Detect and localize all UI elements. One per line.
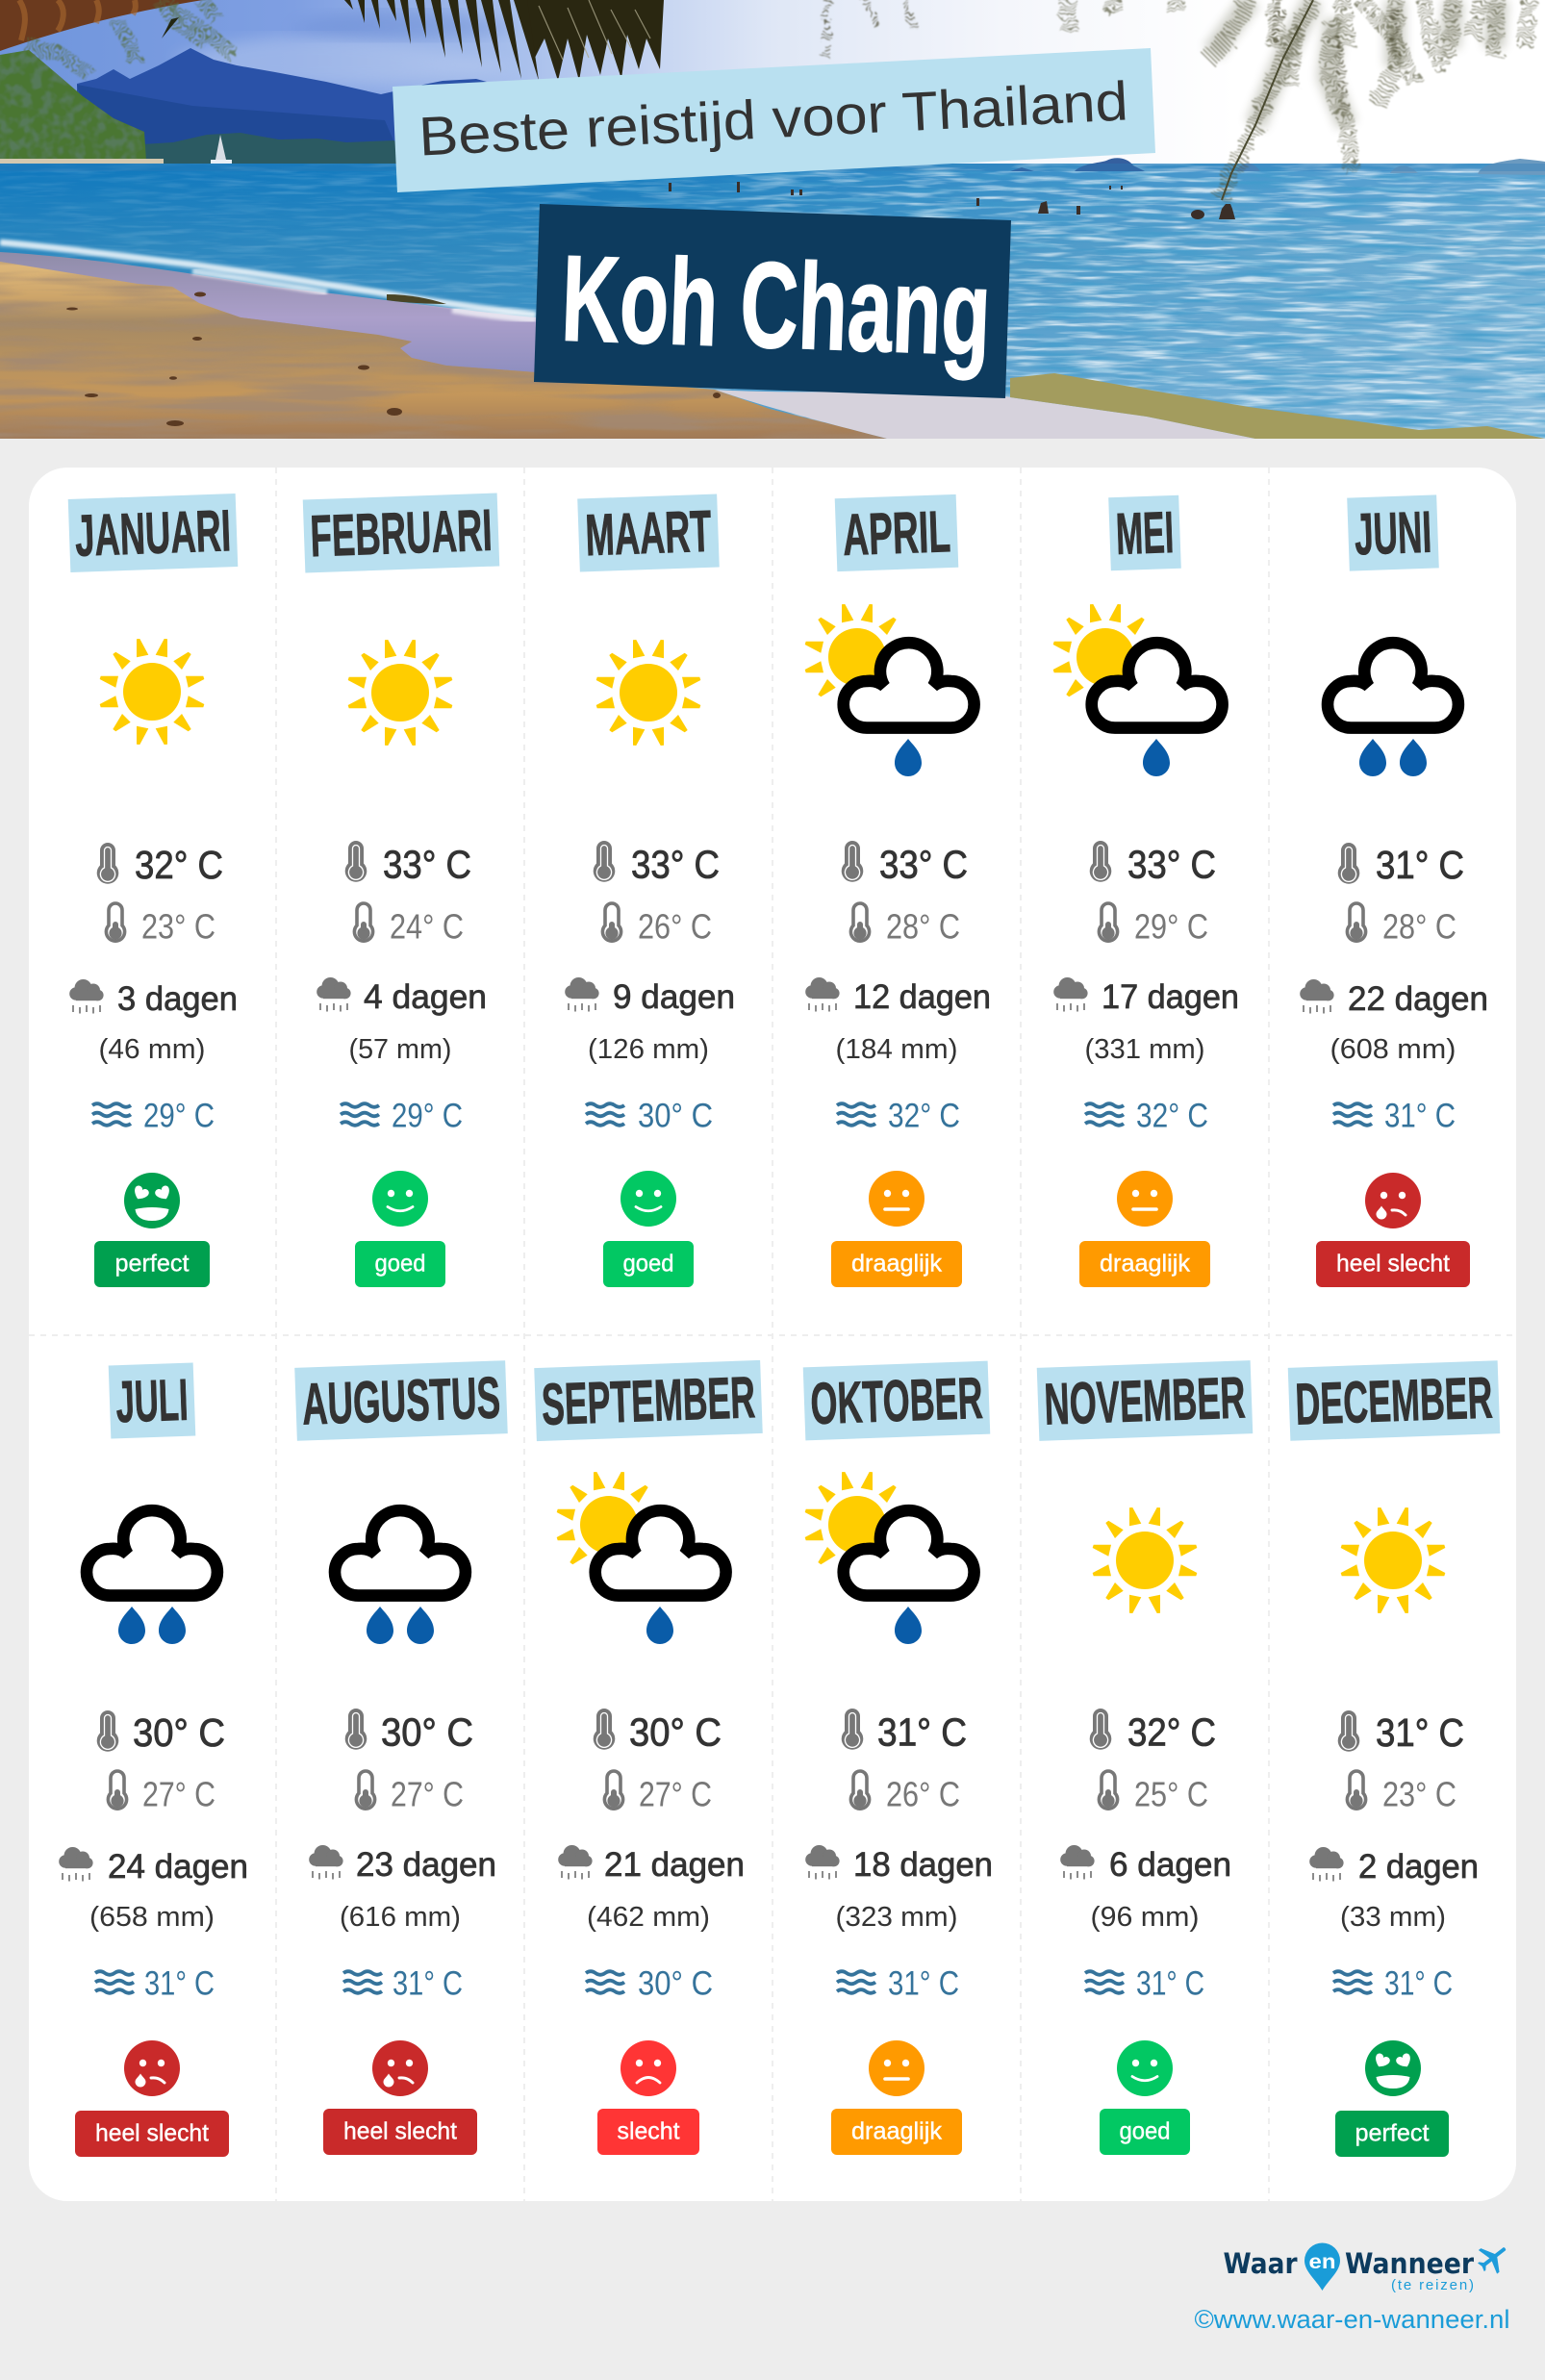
rainfall: (96 mm) (1090, 1902, 1200, 1933)
rating badge: draaglijk (851, 2118, 942, 2145)
month heading (109, 1362, 195, 1439)
min temperature (1099, 1771, 1208, 1814)
rain days: 24 dagen (108, 1848, 248, 1886)
sea temperature: 31° C (1384, 1964, 1453, 2003)
logo: Waar en Wanneer: (te reizen) (1391, 2277, 1474, 2293)
max temperature (1338, 843, 1464, 887)
rating icon (621, 1171, 676, 1227)
month heading: APRIL (842, 498, 951, 568)
min temperature (1347, 903, 1456, 947)
month heading: JANUARI (74, 497, 232, 569)
month heading (835, 494, 958, 571)
sea temperature (1333, 1097, 1456, 1135)
icon: airplane (1472, 2237, 1514, 2279)
title banner: Koh Chang: Koh Chang (560, 229, 993, 381)
min temperature (106, 903, 215, 947)
rating badge (355, 1241, 445, 1287)
rating badge: goed (1120, 2118, 1170, 2145)
sea temperature: 32° C (888, 1097, 960, 1135)
rating badge (1335, 2111, 1449, 2157)
rainfall: (33 mm) (1340, 1902, 1446, 1933)
rain days: 9 dagen (613, 978, 735, 1016)
max temperature: 32° C (1127, 1710, 1216, 1755)
sea temperature: 29° C (143, 1097, 215, 1135)
sea temperature: 32° C (1136, 1097, 1208, 1135)
sea temperature: 31° C (1384, 1097, 1456, 1135)
icon: sun (1341, 1507, 1445, 1613)
max temperature: 31° C (1376, 1710, 1464, 1755)
panel: februari (303, 493, 499, 1287)
icon: cloud and two drops (335, 1510, 466, 1644)
min temperature: 24° C (390, 906, 464, 947)
month heading (294, 1360, 508, 1441)
month heading (68, 494, 238, 572)
month heading: NOVEMBER (1043, 1364, 1247, 1437)
month heading (577, 494, 720, 572)
panel: april (805, 494, 991, 1287)
month heading (303, 493, 499, 573)
icon: sun (348, 640, 452, 746)
month heading: SEPTEMBER (541, 1364, 756, 1437)
rating badge (323, 2109, 477, 2155)
panel: mei (1053, 495, 1239, 1287)
rating icon (869, 2040, 924, 2096)
title banner: Beste reistijd voor Thailand (393, 48, 1155, 192)
rain days: 21 dagen (604, 1846, 745, 1884)
min temperature: 23° C (141, 906, 215, 947)
logo: Waar en Wanneer: Wanneer (1345, 2247, 1475, 2280)
sea temperature (586, 1964, 713, 2003)
rain days (1309, 1847, 1479, 1886)
rating badge: draaglijk (851, 1251, 942, 1278)
title banner: Beste reistijd voor Thailand: Beste reistijd voor Thailand (418, 70, 1129, 168)
rating badge: goed (623, 1251, 673, 1278)
min temperature: 26° C (886, 1774, 960, 1814)
icon: sun (1093, 1507, 1197, 1613)
sea temperature: 31° C (393, 1964, 463, 2003)
min temperature (602, 903, 712, 947)
rating icon (869, 1171, 924, 1227)
panel: juni (1300, 494, 1488, 1287)
rainfall: (126 mm) (588, 1034, 709, 1065)
rating badge (1079, 1241, 1210, 1287)
sea temperature: 30° C (638, 1097, 713, 1135)
rainfall: (658 mm) (89, 1902, 215, 1933)
month heading: MAART (584, 498, 713, 568)
rating badge: heel slecht (343, 2118, 457, 2145)
rainfall: (462 mm) (587, 1902, 710, 1933)
min temperature: 27° C (142, 1774, 215, 1814)
sea temperature (586, 1097, 713, 1135)
max temperature: 30° C (133, 1710, 225, 1755)
panel: december (1288, 1360, 1500, 2157)
sea temperature (837, 1097, 960, 1135)
rating badge (603, 1241, 694, 1287)
rainfall: (184 mm) (835, 1034, 958, 1065)
rating badge (1316, 1241, 1470, 1287)
min temperature (356, 1771, 464, 1814)
month heading: OKTOBER (809, 1365, 984, 1436)
rainfall: (46 mm) (98, 1034, 206, 1065)
sea temperature: 31° C (888, 1964, 959, 2003)
rain days: 22 dagen (1348, 980, 1488, 1018)
min temperature (1347, 1771, 1456, 1814)
rating badge: perfect (1355, 2120, 1430, 2147)
rating icon (1117, 1171, 1173, 1227)
rain days: 12 dagen (853, 978, 991, 1016)
sea temperature (95, 1964, 215, 2003)
rating badge: perfect (115, 1251, 190, 1278)
panel: november (1037, 1360, 1253, 2155)
panel: calendar card (29, 468, 1516, 2201)
sea temperature (1085, 1964, 1204, 2003)
max temperature: 33° C (879, 843, 968, 887)
month heading (534, 1360, 763, 1441)
icon: map pin (1304, 2243, 1340, 2291)
max temperature (594, 841, 720, 887)
icon: cloud and two drops (1328, 643, 1458, 776)
rainfall: (608 mm) (1330, 1034, 1456, 1065)
min temperature: 25° C (1134, 1774, 1208, 1814)
max temperature (1090, 1709, 1216, 1755)
max temperature (345, 841, 471, 887)
month heading: AUGUSTUS (301, 1364, 501, 1437)
month heading (1347, 494, 1439, 571)
min temperature (1099, 903, 1208, 947)
month heading (1108, 495, 1181, 570)
sea temperature (1085, 1097, 1208, 1135)
min temperature (604, 1771, 712, 1814)
icon: sun, cloud and drop (557, 1472, 726, 1644)
rating icon (621, 2040, 676, 2096)
sea temperature (343, 1964, 463, 2003)
rating badge: draaglijk (1100, 1251, 1190, 1278)
rain days (565, 977, 735, 1016)
sea temperature: 31° C (144, 1964, 215, 2003)
rainfall: (57 mm) (348, 1034, 452, 1065)
rating badge: heel slecht (95, 2120, 209, 2147)
max temperature: 31° C (877, 1710, 967, 1755)
sea temperature: 29° C (392, 1097, 463, 1135)
rating badge (597, 2109, 699, 2155)
sea temperature: 31° C (1136, 1964, 1204, 2003)
rain days: 4 dagen (364, 978, 487, 1016)
max temperature: 33° C (1127, 843, 1216, 887)
rating icon (1365, 2040, 1421, 2096)
max temperature (345, 1709, 473, 1755)
panel: september (534, 1360, 763, 2155)
min temperature (850, 1771, 960, 1814)
month heading: JUNI (1354, 499, 1432, 567)
max temperature: 31° C (1376, 843, 1464, 887)
max temperature: 32° C (135, 843, 223, 887)
rain days: 6 dagen (1109, 1846, 1231, 1884)
icon: map pin: en (1308, 2251, 1335, 2273)
rating badge (75, 2111, 229, 2157)
max temperature (842, 1709, 967, 1755)
rating icon (124, 2040, 180, 2096)
min temperature (850, 903, 960, 947)
logo: Waar en Wanneer: Waar (1224, 2247, 1298, 2280)
month heading (1037, 1360, 1253, 1441)
icon: sun, cloud and drop (805, 604, 975, 776)
month heading: FEBRUARI (309, 497, 494, 569)
rainfall: (331 mm) (1084, 1034, 1205, 1065)
min temperature: 29° C (1134, 906, 1208, 947)
max temperature (1090, 841, 1216, 887)
rain days: 2 dagen (1358, 1848, 1479, 1886)
hero photo: tropical beach (0, 0, 1545, 439)
max temperature: 33° C (383, 843, 471, 887)
panel: juli (59, 1362, 248, 2157)
max temperature: 30° C (629, 1710, 722, 1755)
min temperature: 23° C (1382, 1774, 1456, 1814)
rain days: 3 dagen (117, 980, 238, 1018)
rating icon (372, 1171, 428, 1227)
min temperature: 28° C (886, 906, 960, 947)
rating badge: slecht (618, 2118, 680, 2145)
logo: Waar en Wanneer (1224, 2237, 1514, 2293)
rain days (1060, 1845, 1231, 1884)
rain days: 17 dagen (1102, 978, 1239, 1016)
month heading: MEI (1115, 499, 1175, 567)
panel: oktober (803, 1361, 993, 2155)
rain days: 23 dagen (356, 1846, 496, 1884)
rainfall: (323 mm) (835, 1902, 958, 1933)
min temperature: 27° C (639, 1774, 712, 1814)
max temperature (97, 843, 223, 887)
min temperature: 28° C (1382, 906, 1456, 947)
max temperature (842, 841, 968, 887)
rating badge: heel slecht (1336, 1251, 1450, 1278)
rating icon (1117, 2040, 1173, 2096)
sea temperature (837, 1964, 959, 2003)
title banner: Koh Chang (534, 204, 1011, 398)
rating icon (1365, 1173, 1421, 1228)
max temperature: 30° C (381, 1710, 473, 1755)
icon: cloud and two drops (87, 1510, 217, 1644)
min temperature (108, 1771, 215, 1814)
panel: augustus (294, 1360, 508, 2155)
panel: maart (565, 494, 735, 1287)
min temperature: 26° C (638, 906, 712, 947)
sea temperature (341, 1097, 463, 1135)
icon: sun, cloud and drop (805, 1472, 975, 1644)
rating badge (1100, 2109, 1190, 2155)
icon: sun (100, 639, 204, 745)
rainfall: (616 mm) (340, 1902, 461, 1933)
max temperature (97, 1710, 225, 1755)
sea temperature (92, 1097, 215, 1135)
website credit: ©www.waar-en-wanneer.nl (1195, 2305, 1510, 2334)
icon: sun, cloud and drop (1053, 604, 1223, 776)
rain days: 18 dagen (853, 1846, 993, 1884)
max temperature: 33° C (631, 843, 720, 887)
rain days (317, 977, 487, 1016)
rain days (69, 979, 238, 1018)
sea temperature (1333, 1964, 1453, 2003)
max temperature (594, 1709, 722, 1755)
min temperature (354, 903, 464, 947)
sea temperature: 30° C (638, 1964, 713, 2003)
rating badge (94, 1241, 210, 1287)
icon: sun (596, 640, 700, 746)
min temperature: 27° C (391, 1774, 464, 1814)
month heading (803, 1361, 990, 1440)
rating badge (831, 2109, 962, 2155)
rating icon (124, 1173, 180, 1228)
rating badge: goed (375, 1251, 425, 1278)
rating badge (831, 1241, 962, 1287)
panel: januari (68, 494, 238, 1287)
month heading: JULI (114, 1367, 190, 1434)
rating icon (372, 2040, 428, 2096)
max temperature (1338, 1710, 1464, 1755)
